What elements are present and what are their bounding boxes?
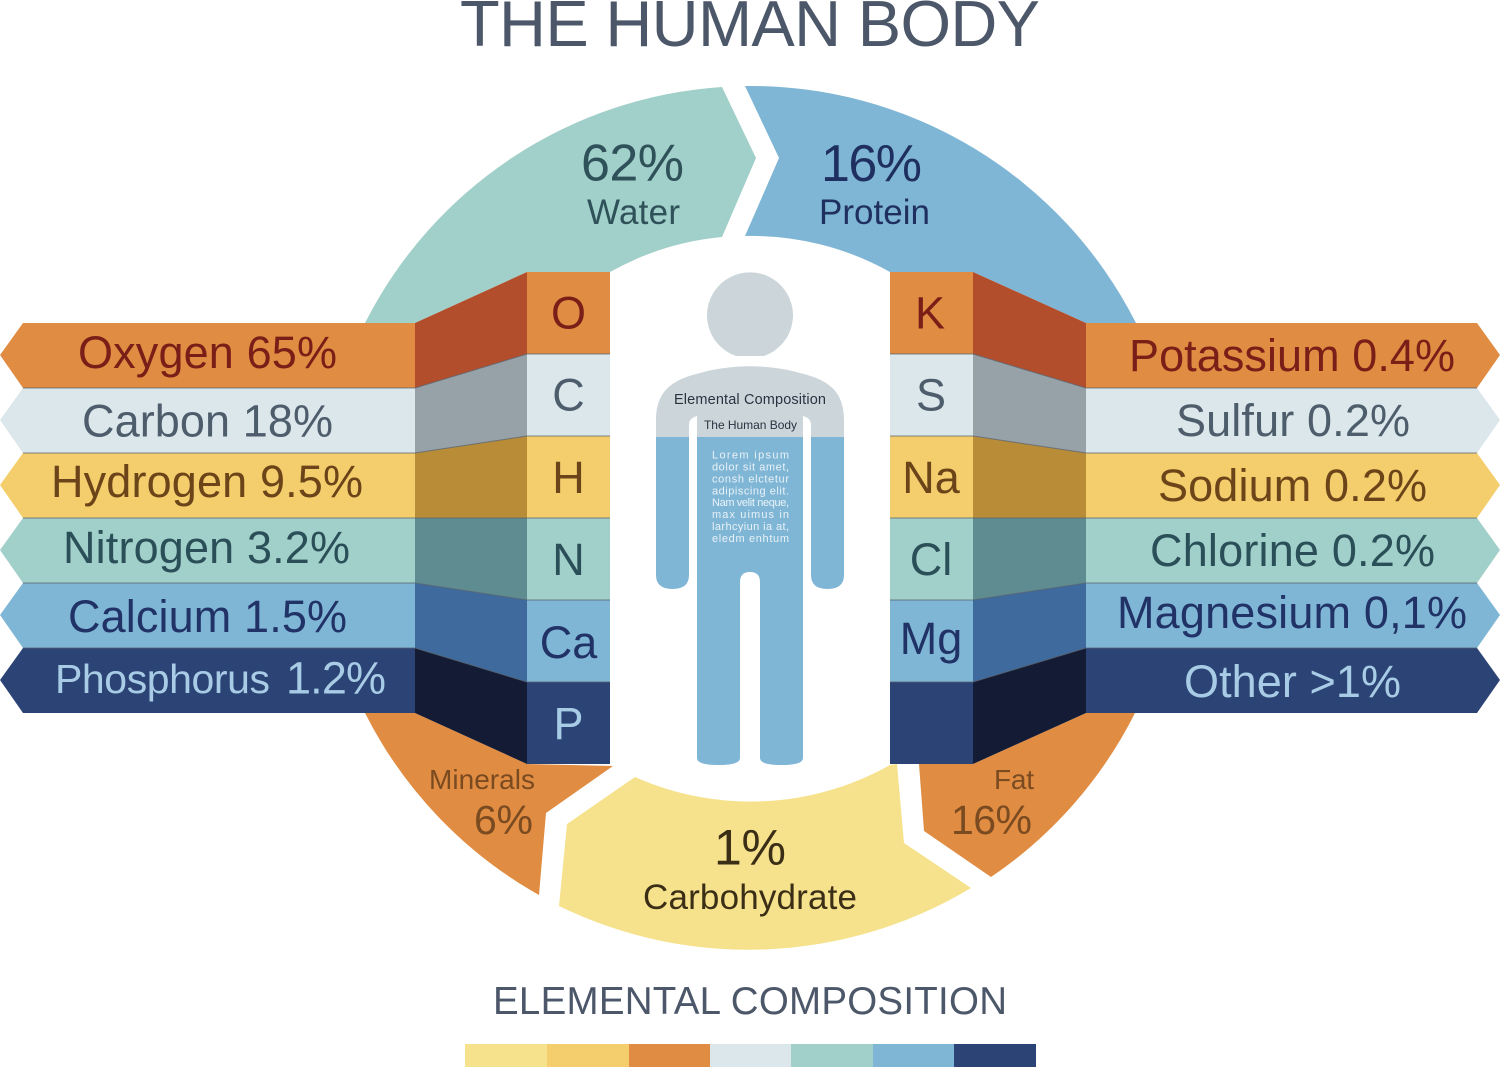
row: nitrogen: Nitrogen 3.2%	[63, 522, 350, 573]
row: carbon: C	[552, 370, 585, 420]
figure body text: larhcyiun ia at,	[712, 521, 789, 533]
row: sodium: Na	[902, 452, 961, 503]
row: sodium	[890, 436, 1500, 518]
row: magnesium	[890, 583, 1500, 682]
panel: minerals segment	[365, 713, 613, 895]
panel: water segment: Water	[587, 193, 680, 232]
heading: elemental composition: ELEMENTAL COMPOSITION	[493, 980, 1007, 1023]
panel: protein segment: 16%	[821, 135, 922, 193]
row: calcium: Ca	[540, 617, 598, 668]
head	[707, 272, 793, 356]
figure body text: eledm enhtum	[712, 533, 789, 545]
row: phosphorus	[0, 648, 610, 764]
panel: carbohydrate segment: 1%	[714, 820, 786, 876]
row: sodium: Sodium 0.2%	[1158, 460, 1427, 511]
panel: fat segment	[919, 713, 1135, 877]
row: calcium: Calcium 1.5%	[68, 591, 347, 642]
figure body text: Nam velit neque,	[712, 497, 789, 509]
row: potassium: Potassium 0.4%	[1129, 330, 1455, 381]
row: carbon: Carbon 18%	[82, 396, 333, 446]
figure body text: max uimus in	[712, 509, 789, 521]
row: sulfur: Sulfur 0.2%	[1176, 395, 1410, 446]
row: sulfur	[890, 354, 1500, 453]
row: magnesium: Magnesium 0,1%	[1117, 587, 1467, 638]
row: phosphorus: P	[553, 698, 584, 749]
figure body text: adipiscing elit.	[712, 486, 789, 498]
row: oxygen: Oxygen 65%	[78, 327, 337, 378]
row: oxygen: O	[551, 288, 586, 338]
left arm	[656, 437, 689, 589]
panel: carbohydrate segment: Carbohydrate	[643, 878, 857, 917]
icon: human figure	[656, 272, 844, 765]
panel: right element bands	[890, 272, 1500, 764]
legend colour bar	[465, 1044, 1036, 1067]
row: calcium	[0, 583, 610, 682]
row: oxygen	[0, 272, 610, 388]
panel: water segment: 62%	[581, 134, 684, 192]
row: hydrogen	[0, 436, 610, 518]
panel: fat segment: Fat	[994, 764, 1034, 795]
figure body text: dolor sit amet,	[712, 462, 789, 474]
row: hydrogen: H	[552, 452, 585, 503]
row: potassium	[890, 272, 1500, 388]
row: chlorine: Cl	[910, 534, 952, 585]
panel: carbohydrate segment	[559, 764, 971, 950]
row: potassium: K	[915, 288, 945, 338]
row: other	[890, 648, 1500, 764]
figure body text	[712, 450, 789, 545]
row: nitrogen	[0, 518, 610, 600]
row: chlorine: Chlorine 0.2%	[1150, 525, 1435, 576]
figure heading: Elemental Composition	[674, 392, 826, 408]
row: magnesium: Mg	[900, 613, 962, 664]
panel: water segment	[365, 87, 756, 323]
row: phosphorus: Phosphorus	[55, 656, 270, 702]
row: sulfur: S	[916, 370, 946, 420]
figure subheading: The Human Body	[704, 418, 797, 432]
figure body text: consh elctetur	[712, 474, 789, 486]
figure body text: Lorem ipsum	[712, 450, 789, 462]
panel: protein segment: Protein	[819, 193, 930, 232]
row: nitrogen: N	[552, 534, 585, 585]
panel: minerals segment: 6%	[474, 797, 533, 843]
shoulders	[656, 366, 844, 437]
right arm	[811, 437, 844, 589]
torso and legs	[697, 437, 803, 765]
row: chlorine	[890, 518, 1500, 600]
panel: left element bands	[0, 272, 610, 764]
row: other: Other >1%	[1184, 656, 1401, 707]
row: hydrogen: Hydrogen 9.5%	[51, 456, 363, 507]
row: carbon	[0, 354, 610, 453]
panel: protein segment	[745, 86, 1136, 323]
panel: fat segment: 16%	[951, 797, 1032, 843]
row: phosphorus: 1.2%	[286, 652, 386, 704]
panel: minerals segment: Minerals	[429, 764, 535, 795]
